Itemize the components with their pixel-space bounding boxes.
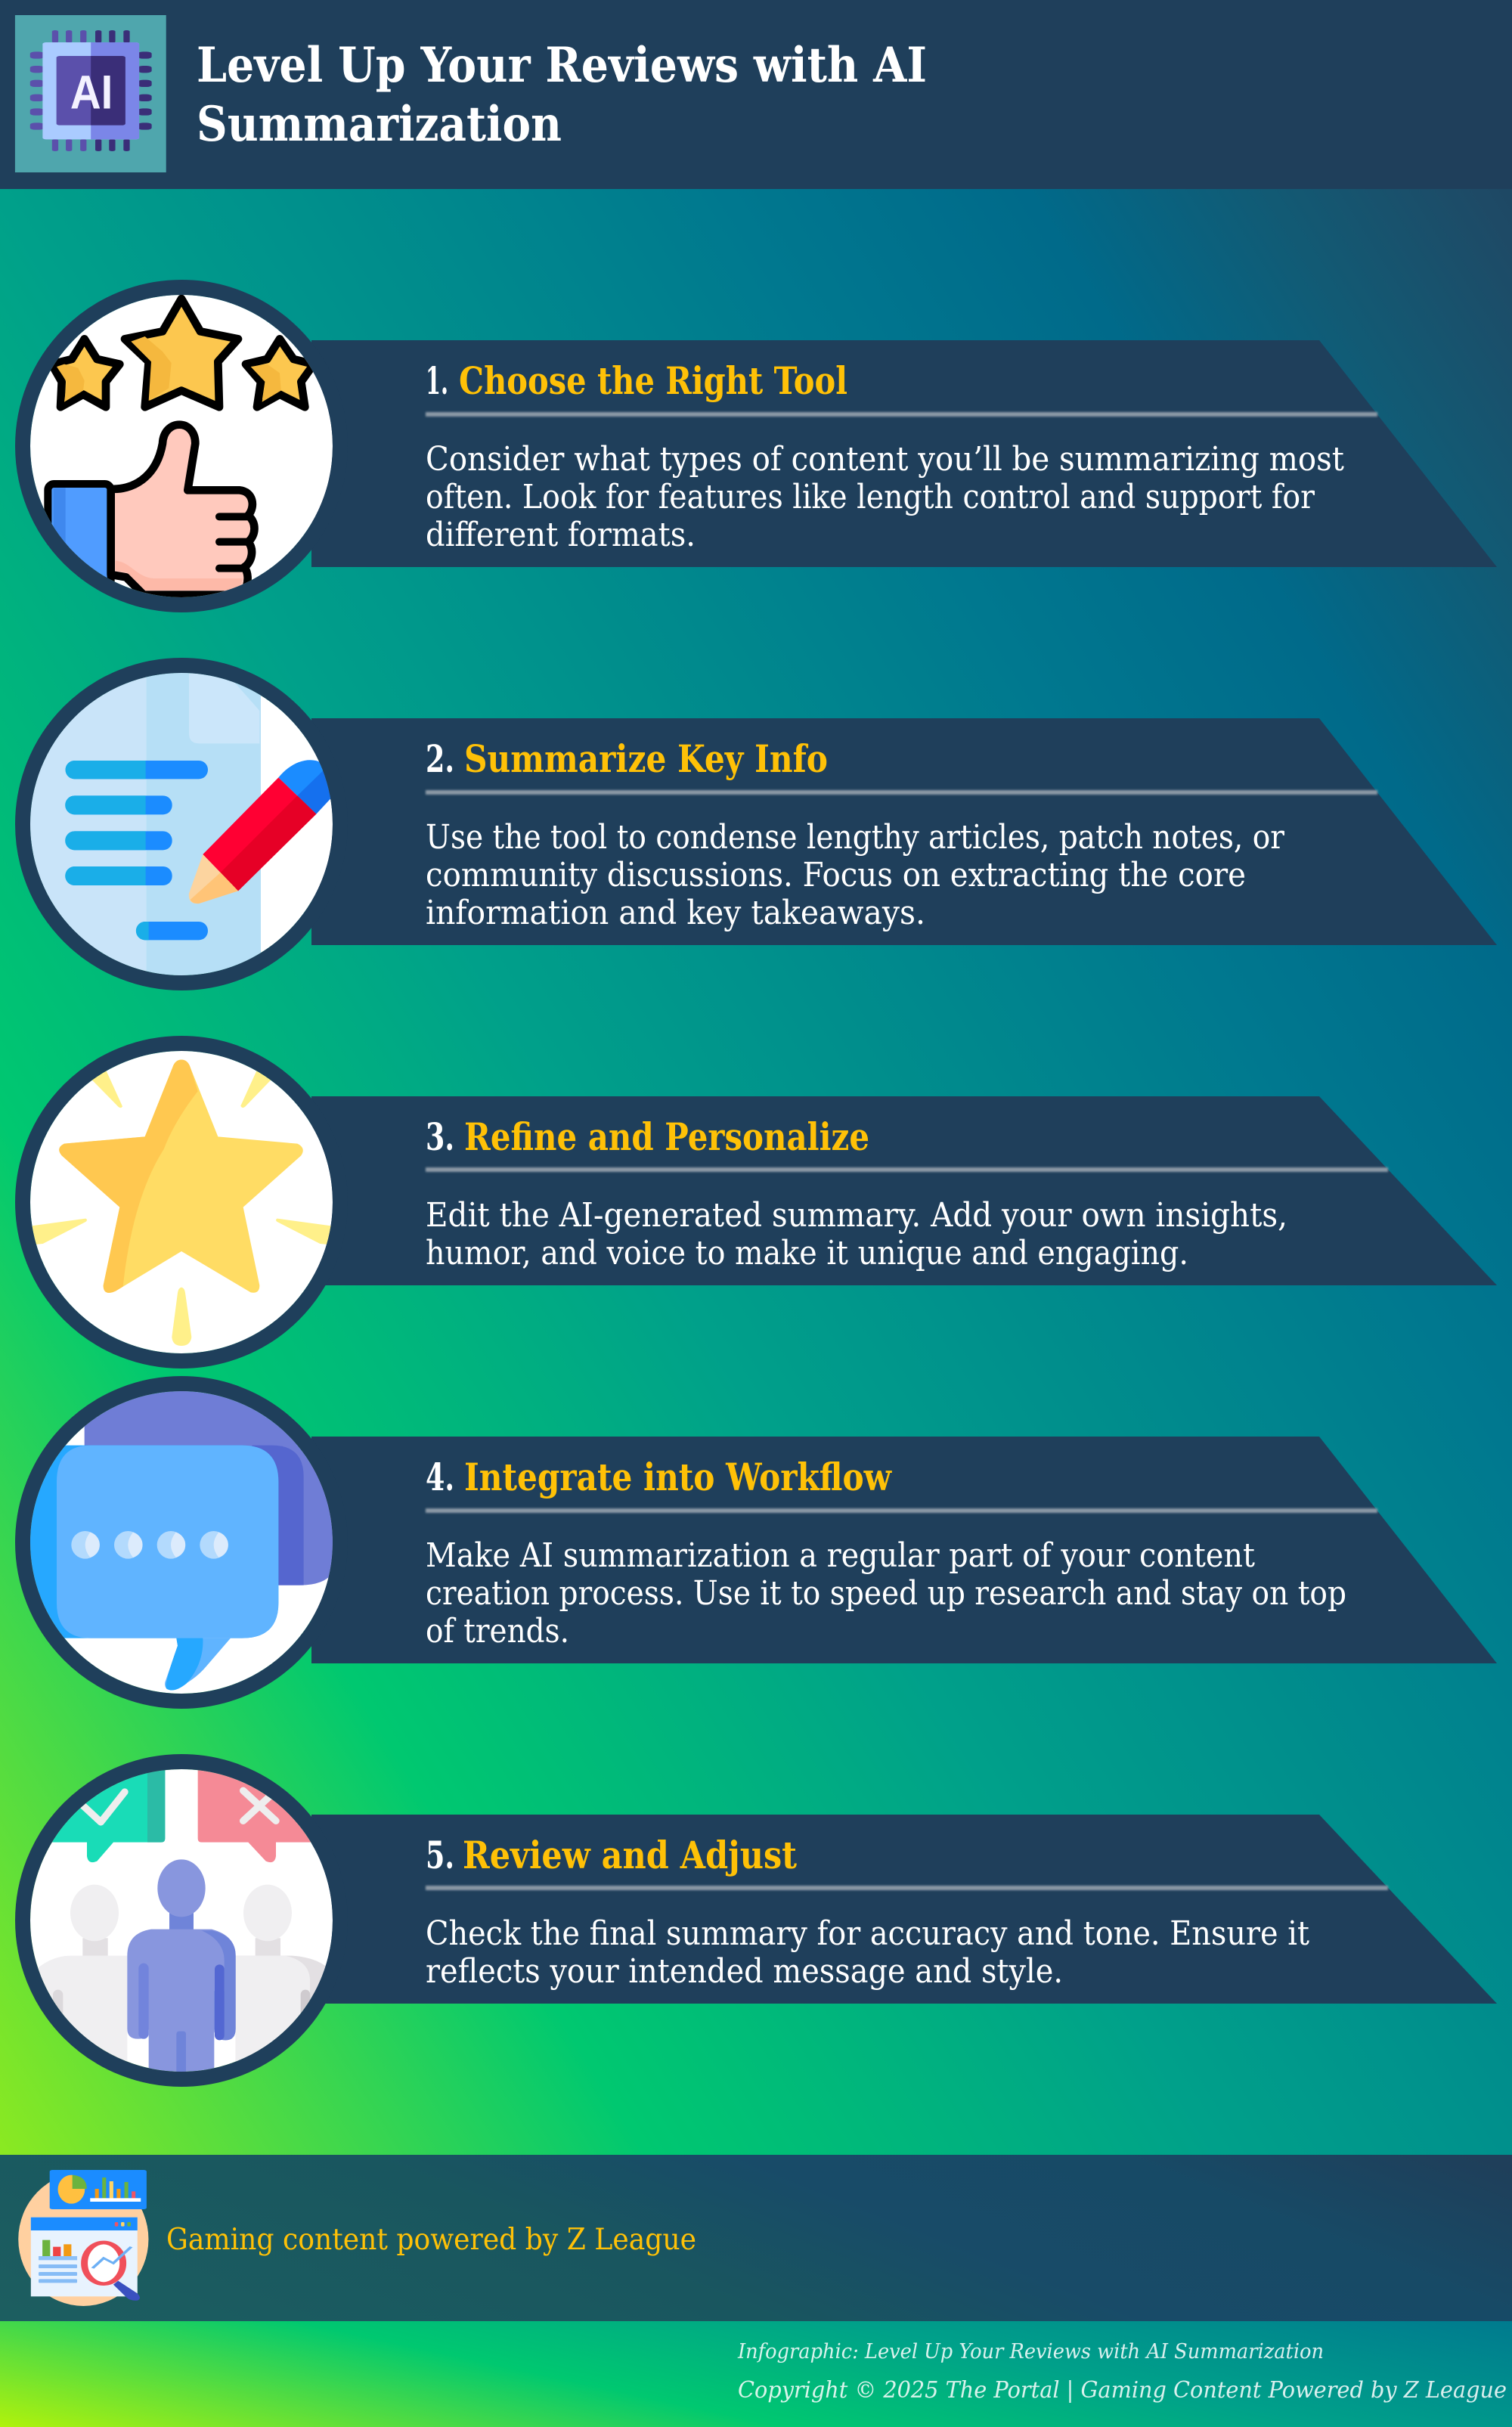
banner: step 1: different formats. (426, 516, 696, 554)
title (197, 37, 927, 153)
banner: step 4 (311, 1437, 1497, 1663)
banner: step 3: humor, and voice to make it unique and engaging. (426, 1234, 1188, 1272)
banner: step 5 (311, 1815, 1497, 2004)
banner: step 2: information and key takeaways. (426, 894, 925, 932)
icon: people with feedback bubbles (25, 1764, 338, 2077)
panel: step 2 (23, 665, 1497, 983)
icon: AI chip logo (15, 15, 166, 172)
banner: step 4: creation process. Use it to speed up research and stay on top (426, 1574, 1346, 1613)
banner: step 4: Integrate into Workflow (464, 1455, 893, 1499)
banner: step 1: often. Look for features like length control and support for (426, 478, 1315, 516)
banner: step 5: Review and Adjust (463, 1833, 797, 1877)
banner: step 1: 1. (426, 358, 448, 403)
credits (737, 2340, 1507, 2404)
header bar (0, 0, 1512, 189)
banner: step 2: Summarize Key Info (464, 736, 828, 781)
circle frame (23, 665, 340, 983)
banner: step 1: Choose the Right Tool (459, 358, 847, 403)
circle frame (23, 1043, 340, 1361)
circle frame (23, 287, 340, 605)
icon: analytics dashboard (18, 2170, 148, 2306)
banner: step 1: Consider what types of content you’ll be summarizing most (426, 440, 1344, 479)
banner: step 2: 2. (426, 736, 454, 781)
banner: step 5: 5. (426, 1833, 454, 1877)
banner: step 5: reflects your intended message and style. (426, 1952, 1063, 1991)
icon: AI chip logo: AI (70, 65, 113, 119)
credits: Infographic: Level Up Your Reviews with AI Summarization (737, 2340, 1324, 2363)
banner: step 4: Make AI summarization a regular part of your content (426, 1536, 1255, 1575)
footer bar (0, 2155, 1512, 2321)
icon: shining star (30, 1051, 333, 1353)
circle frame (23, 1762, 340, 2079)
banner: step 4: 4. (426, 1455, 454, 1499)
panel: step 3 (23, 1043, 1497, 1361)
banner: step 4: of trends. (426, 1612, 569, 1651)
icon: chat bubbles (25, 1386, 338, 1694)
footer background strip (0, 2321, 1512, 2427)
banner: step 2 (311, 718, 1497, 945)
panel: step 5 (23, 1762, 1497, 2079)
banner: step 3 (311, 1096, 1497, 1285)
banner: step 2: community discussions. Focus on extracting the core (426, 856, 1246, 894)
banner: step 3: Refine and Personalize (464, 1114, 869, 1159)
banner: step 3: 3. (426, 1114, 454, 1159)
circle frame (23, 1384, 340, 1701)
banner: step 2: Use the tool to condense lengthy articles, patch notes, or (426, 818, 1285, 857)
title: Level Up Your Reviews with AI (197, 37, 927, 94)
banner: step 3: Edit the AI-generated summary. Add your own insights, (426, 1196, 1287, 1235)
banner: step 1 (311, 340, 1497, 567)
icon: stars and thumbs up (30, 295, 333, 597)
panel: step 4 (23, 1384, 1497, 1701)
icon: document and pencil (25, 668, 333, 981)
banner: step 5: Check the final summary for accuracy and tone. Ensure it (426, 1914, 1309, 1953)
title: Summarization (197, 96, 562, 153)
panel: step 1 (23, 287, 1497, 605)
footer tagline: Gaming content powered by Z League (166, 2223, 696, 2257)
